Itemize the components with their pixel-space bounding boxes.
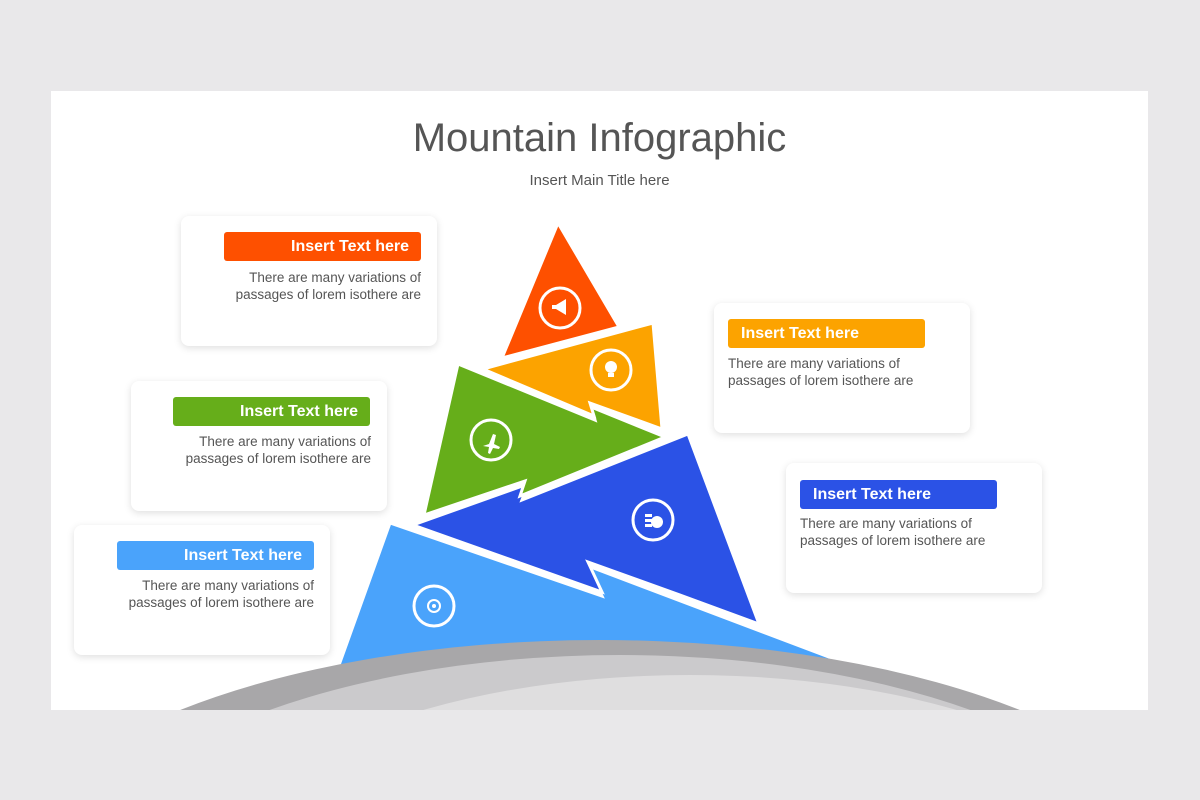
ground arcs: [0, 640, 1200, 800]
card: yellow: Insert Text here: [741, 325, 859, 342]
card: green: Insert Text here: [240, 403, 358, 420]
light blue layer: [338, 523, 850, 668]
mountain chart: [180, 226, 1020, 710]
card: yellow: There are many variations of: [728, 356, 900, 371]
card: green: There are many variations of: [199, 434, 371, 449]
card: yellow: [714, 303, 970, 433]
card: orange: There are many variations of: [249, 270, 421, 285]
card: yellow: passages of lorem isothere are: [728, 373, 913, 388]
slide: [51, 91, 1148, 710]
yellow layer: [483, 323, 662, 429]
card: dark blue: There are many variations of: [800, 516, 972, 531]
card: green: passages of lorem isothere are: [186, 451, 371, 466]
dark blue layer: [413, 434, 759, 624]
green layer: [424, 364, 665, 515]
card: dark blue: [786, 463, 1042, 593]
card: orange: passages of lorem isothere are: [236, 287, 421, 302]
card: green: [131, 381, 387, 511]
card: dark blue: Insert Text here: [813, 486, 931, 503]
subtitle: Insert Main Title here: [529, 172, 670, 189]
card: orange: Insert Text here: [291, 238, 409, 255]
icon circles: [414, 288, 673, 626]
card: dark blue: passages of lorem isothere are: [800, 533, 985, 548]
icons: [428, 299, 663, 612]
card: light blue: [74, 525, 330, 655]
orange layer: [502, 223, 619, 358]
card: light blue: Insert Text here: [184, 547, 302, 564]
card: light blue: There are many variations of: [142, 578, 314, 593]
card: orange: [181, 216, 437, 346]
card: light blue: passages of lorem isothere are: [129, 595, 314, 610]
title: Mountain Infographic: [413, 116, 786, 160]
